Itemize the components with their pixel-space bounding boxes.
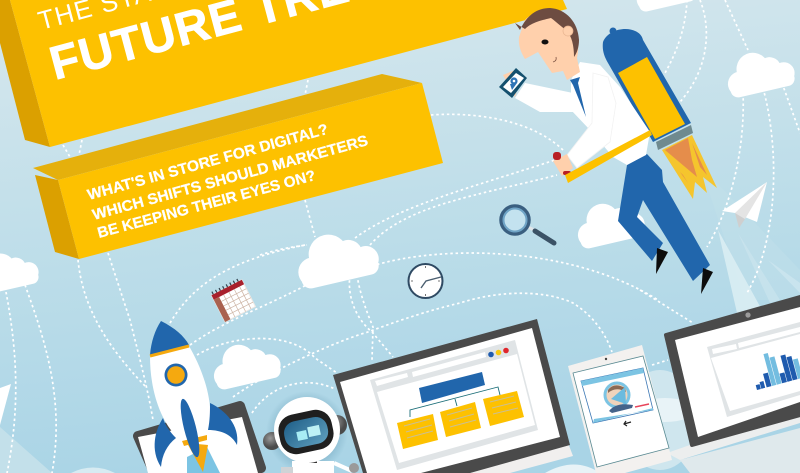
icon: paper plane [722,182,767,228]
laptop base [667,415,800,473]
rocket fins [155,418,176,467]
tablet device [568,345,672,473]
browser dots [488,348,509,357]
subtitle text: BE KEEPING THEIR EYES ON? [96,167,317,242]
rocket body [150,346,240,473]
subtitle text: WHAT'S IN STORE FOR DIGITAL? [86,121,330,204]
head [515,8,580,80]
laptop bezel [666,297,800,445]
icon: calendar [210,277,255,322]
tablet behind rocket [138,406,261,473]
desktop monitor [333,319,573,473]
monitor bezel [333,319,570,473]
trousers [618,154,710,281]
icon: magnifying glass [501,206,554,243]
bar chart [748,346,800,390]
phone [499,68,527,98]
jetpack man [499,8,717,294]
rocket exhaust [187,447,220,473]
panel: subtitle [33,74,443,259]
rocket window [164,364,188,386]
org chart [397,372,524,449]
rewind icon [624,421,631,426]
monitor screen [340,328,560,473]
light shapes behind devices [0,165,800,473]
laptop [666,297,800,445]
robot body [292,461,334,473]
robot head [274,397,340,463]
rocket flame [182,435,207,446]
tie [570,77,586,117]
rocket nose [150,321,189,355]
shoes [656,248,713,294]
shirt [515,62,650,168]
subtitle text: WHICH SHIFTS SHOULD MARKETERS [91,132,370,224]
icon: clock [408,264,442,298]
panel: main title [0,0,567,147]
rocket [150,321,240,473]
controller hand [553,152,573,176]
jetpack [603,28,693,150]
rocket centre fin [177,397,203,459]
flames [662,135,717,199]
video player [581,368,653,423]
robot [263,391,359,473]
harness bar [565,130,652,183]
monitor stand edge [470,443,573,473]
left paper plane [0,384,11,425]
laptop window [707,322,800,417]
laptop screen [675,307,800,437]
browser window [370,340,538,470]
subtitle text [86,121,370,242]
